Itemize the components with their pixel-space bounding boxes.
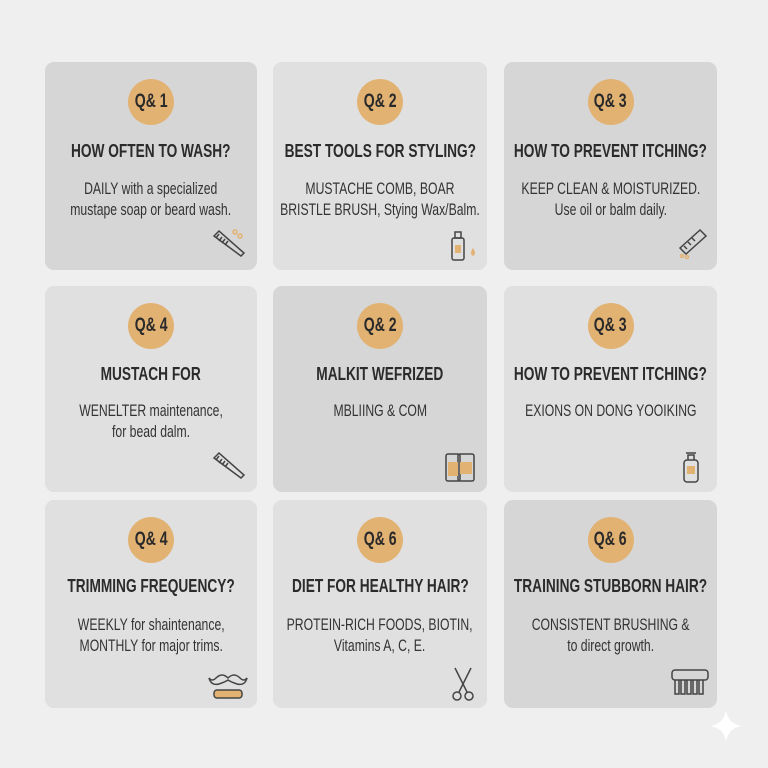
body text: MONTHLY for major trims. bbox=[79, 637, 223, 655]
badge bbox=[128, 517, 174, 563]
body text: Vitamins A, C, E. bbox=[334, 637, 426, 655]
card 8 bbox=[273, 500, 487, 708]
body text: WENELTER maintenance, bbox=[79, 402, 223, 420]
title: HOW TO PREVENT ITCHING? bbox=[514, 363, 707, 384]
body text: EXIONS ON DONG YOOIKING bbox=[525, 402, 696, 420]
body text bbox=[532, 616, 690, 655]
title: TRAINING STUBBORN HAIR? bbox=[514, 575, 707, 596]
badge: Q& 3 bbox=[594, 315, 627, 336]
body text bbox=[78, 616, 224, 655]
title: MALKIT WEFRIZED bbox=[316, 363, 444, 384]
card 9 bbox=[504, 500, 717, 708]
badge: Q& 3 bbox=[594, 91, 627, 112]
body text: WEEKLY for shaintenance, bbox=[78, 616, 224, 634]
title: MUSTACH FOR bbox=[101, 363, 201, 384]
icon: brush bbox=[671, 669, 709, 695]
icon: bottle bbox=[451, 231, 475, 261]
icon: tube bbox=[679, 229, 707, 260]
body text: mustape soap or beard wash. bbox=[71, 201, 231, 219]
badge: Q& 4 bbox=[135, 315, 167, 336]
body text: CONSISTENT BRUSHING & bbox=[532, 616, 689, 634]
icon: scissors bbox=[452, 668, 474, 701]
card 7 bbox=[45, 500, 257, 708]
body text bbox=[79, 402, 223, 441]
card 1 bbox=[45, 62, 257, 270]
card 2 bbox=[273, 62, 487, 270]
body text bbox=[287, 616, 473, 655]
body text: MBLIING & COM bbox=[333, 402, 427, 420]
title: HOW OFTEN TO WASH? bbox=[71, 140, 231, 161]
title: DIET FOR HEALTHY HAIR? bbox=[292, 575, 468, 596]
body text: BRISTLE BRUSH, Stying Wax/Balm. bbox=[280, 201, 480, 219]
body text: to direct growth. bbox=[567, 637, 654, 655]
badge bbox=[357, 303, 403, 349]
badge bbox=[588, 517, 634, 563]
badge: Q& 6 bbox=[594, 529, 627, 550]
badge bbox=[357, 517, 403, 563]
title: TRIMMING FREQUENCY? bbox=[67, 575, 235, 596]
badge bbox=[357, 79, 403, 125]
icon: comb bbox=[212, 229, 245, 257]
card 5 bbox=[273, 286, 487, 492]
card 3 bbox=[504, 62, 717, 270]
body text bbox=[280, 180, 480, 219]
title: BEST TOOLS FOR STYLING? bbox=[284, 140, 476, 161]
badge: Q& 4 bbox=[135, 529, 167, 550]
body text bbox=[521, 180, 700, 219]
badge bbox=[588, 303, 634, 349]
body text: MUSTACHE COMB, BOAR bbox=[305, 180, 455, 198]
badge bbox=[588, 79, 634, 125]
icon: sparkle bbox=[711, 712, 741, 741]
body text: DAILY with a specialized bbox=[84, 180, 218, 198]
badge bbox=[128, 79, 174, 125]
card 4 bbox=[45, 286, 257, 492]
icon: comb bbox=[212, 452, 245, 479]
icon: pump bottle bbox=[683, 452, 699, 483]
body text bbox=[71, 180, 231, 219]
badge: Q& 1 bbox=[135, 91, 167, 112]
badge: Q& 6 bbox=[364, 529, 396, 550]
title: HOW TO PREVENT ITCHING? bbox=[514, 140, 707, 161]
body text: PROTEIN-RICH FOODS, BIOTIN, bbox=[287, 616, 473, 634]
body text: KEEP CLEAN & MOISTURIZED. bbox=[521, 180, 700, 198]
badge bbox=[128, 303, 174, 349]
body text: Use oil or balm daily. bbox=[554, 201, 667, 219]
card 6 bbox=[504, 286, 717, 492]
icon: jars bbox=[445, 453, 475, 482]
badge: Q& 2 bbox=[364, 91, 396, 112]
body text: for bead dalm. bbox=[112, 423, 190, 441]
badge: Q& 2 bbox=[364, 315, 396, 336]
icon: mustache bbox=[208, 674, 248, 699]
